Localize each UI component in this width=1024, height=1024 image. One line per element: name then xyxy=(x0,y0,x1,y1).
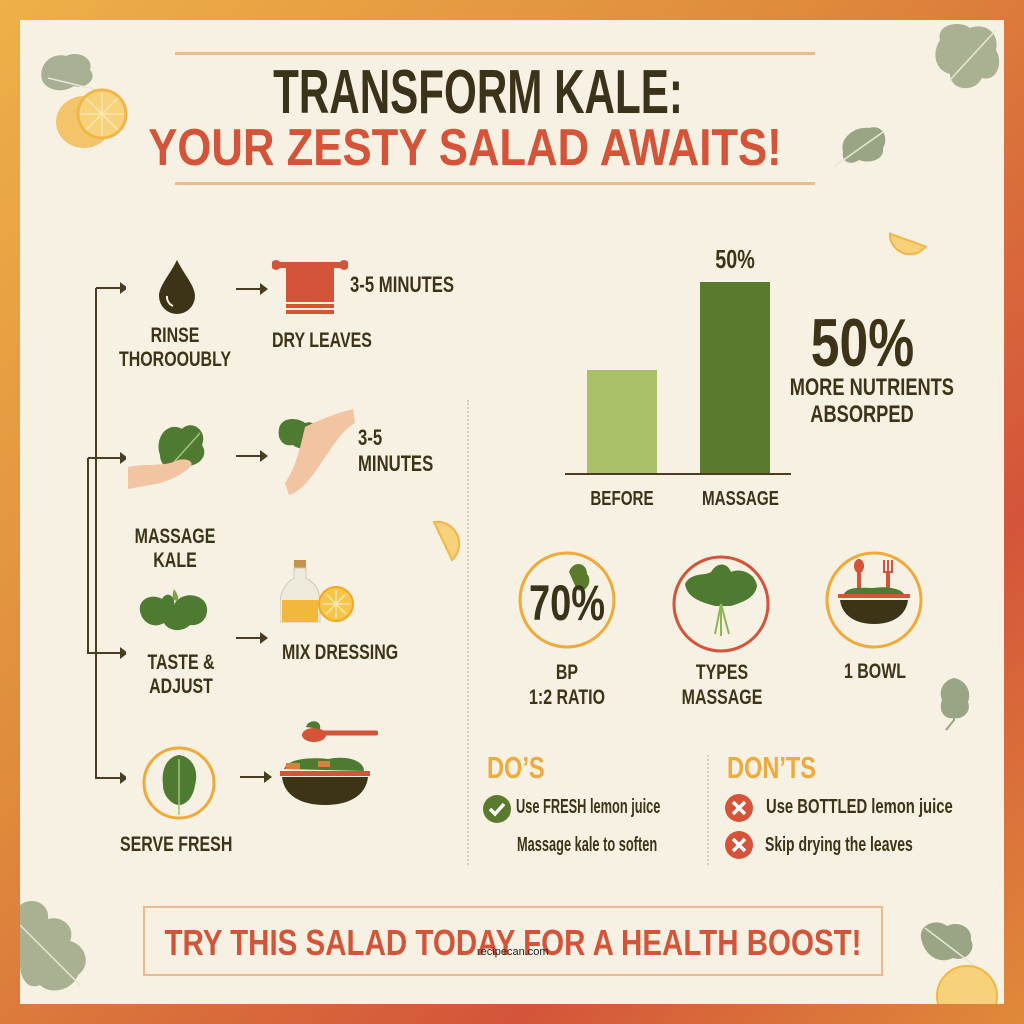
icon: cross xyxy=(724,830,754,860)
icon: hand with kale xyxy=(128,425,204,489)
title: TRANSFORM KALE: xyxy=(273,58,683,127)
caption: MORE NUTRIENTS xyxy=(790,374,954,401)
label xyxy=(682,661,762,709)
label: TYPES xyxy=(696,661,748,684)
decoration: kale and lemon bottom-right xyxy=(915,918,1004,1004)
label: dry leaves: DRY LEAVES xyxy=(272,329,372,352)
icon: hands rubbing kale xyxy=(278,409,355,495)
item: Use BOTTLED lemon juice xyxy=(766,796,953,818)
label: RINSE xyxy=(151,324,199,347)
bottom title rule xyxy=(175,182,815,185)
big number: 50% xyxy=(811,305,914,381)
label: MASSAGE xyxy=(682,686,762,709)
subtitle: YOUR ZESTY SALAD AWAITS! xyxy=(148,119,782,177)
label: 1 BOWL xyxy=(844,660,906,683)
label: SERVE FRESH xyxy=(120,833,232,856)
item: Skip drying the leaves xyxy=(765,834,913,856)
divider xyxy=(707,755,709,865)
icon: water drop xyxy=(159,260,195,314)
icon: kale bunch ring xyxy=(672,556,770,652)
item: Massage kale to soften xyxy=(517,834,657,856)
decoration: kale leaf top-left xyxy=(41,54,96,90)
text: 3-5 minutes xyxy=(358,425,433,476)
step 4: serve xyxy=(120,721,378,856)
heading: DON’TS xyxy=(727,750,816,785)
label: MASSAGE xyxy=(135,525,215,548)
flow connector xyxy=(87,282,126,784)
call to action box xyxy=(143,906,883,976)
icon: salad bowl with spoon xyxy=(280,721,378,805)
panel: do's xyxy=(483,750,660,856)
caption xyxy=(790,374,954,428)
panel: don'ts xyxy=(718,750,978,865)
icon: towel xyxy=(272,260,348,314)
label: mix dressing: MIX DRESSING xyxy=(282,641,398,664)
icon: oil bottle and lemon xyxy=(280,560,354,622)
bar: before xyxy=(587,370,657,474)
decoration: lemon slice xyxy=(432,520,460,562)
stat callout xyxy=(790,305,954,428)
icon: kale leaf circle xyxy=(142,746,216,820)
watermark: recipecan.com xyxy=(477,946,549,958)
label: THOROOUBLY xyxy=(119,348,231,371)
stat: 70%: 70% xyxy=(529,575,605,631)
value label: 50% xyxy=(715,244,755,274)
item: Use FRESH lemon juice xyxy=(516,796,660,818)
cta text: TRY THIS SALAD TODAY FOR A HEALTH BOOST! xyxy=(164,922,862,963)
decoration: lemon top-left xyxy=(56,88,128,148)
divider xyxy=(467,400,469,865)
x label: before: BEFORE xyxy=(590,488,654,510)
label xyxy=(529,661,605,709)
label xyxy=(147,651,215,698)
step 2: massage xyxy=(128,409,433,572)
bar chart xyxy=(565,244,791,510)
heading: DO’S xyxy=(487,750,545,785)
label xyxy=(135,525,215,572)
bar: massage xyxy=(700,282,770,474)
arrow xyxy=(236,632,268,644)
axis xyxy=(565,473,791,475)
label: 1:2 RATIO xyxy=(529,686,605,709)
text: 3-5 minutes: MINUTES xyxy=(358,451,433,476)
stat: 1 bowl xyxy=(826,552,922,683)
decoration: kale leaves top-right xyxy=(935,24,1000,88)
icon: bowl ring xyxy=(826,552,922,648)
label xyxy=(119,324,231,371)
label: TASTE & xyxy=(147,651,215,674)
label: BP xyxy=(556,661,578,684)
icon: kale with drop xyxy=(140,589,208,630)
label: ADJUST xyxy=(149,675,213,698)
icon: check xyxy=(483,795,511,823)
stat: 70% xyxy=(518,552,616,709)
step 1: rinse xyxy=(119,260,454,371)
step 3: taste & dressing xyxy=(140,560,398,698)
stat: types massage xyxy=(672,556,770,709)
x label: massage: MASSAGE xyxy=(702,488,779,510)
arrow xyxy=(236,283,268,295)
arrow xyxy=(236,450,268,462)
text: 3-5 minutes: 3-5 MINUTES xyxy=(350,272,454,297)
caption: ABSORPED xyxy=(810,401,914,428)
top rule xyxy=(175,52,815,55)
label: KALE xyxy=(153,549,197,572)
decoration: kale leaf near title xyxy=(835,127,886,166)
arrow xyxy=(240,771,272,783)
text: 3-5 minutes: 3-5 xyxy=(358,425,382,450)
decoration: kale leaf right xyxy=(940,678,970,730)
icon: cross xyxy=(724,793,754,823)
decoration: kale bottom-left xyxy=(20,895,100,1004)
icon ring xyxy=(518,552,616,648)
